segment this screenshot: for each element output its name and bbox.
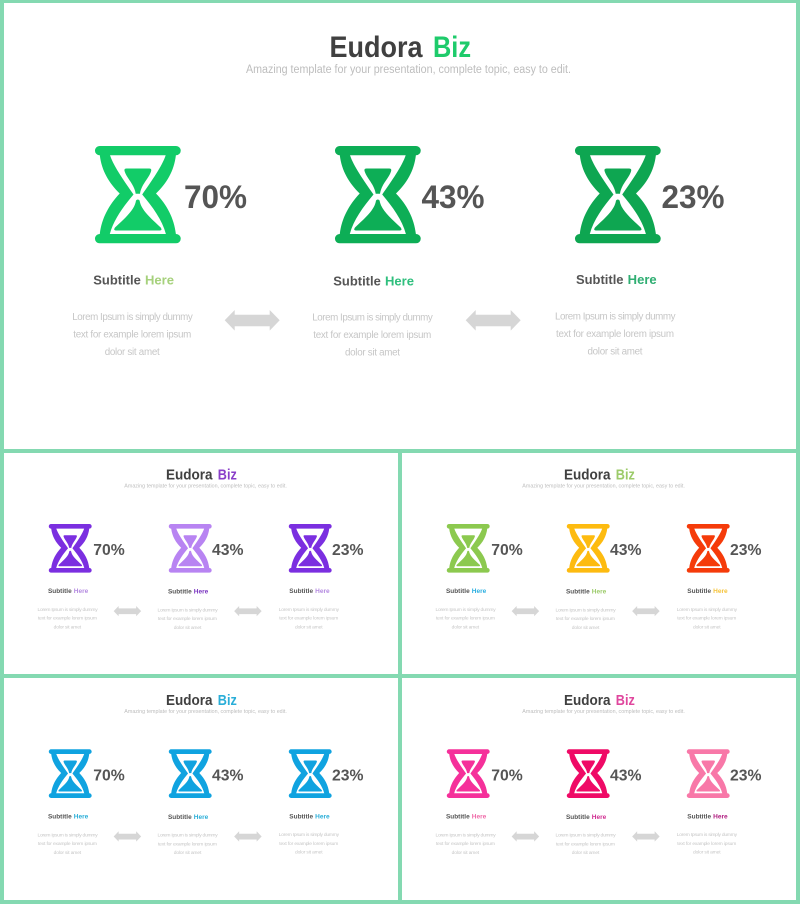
title: Eudora: [166, 692, 213, 709]
body text 1: dolor sit amet: [452, 850, 480, 856]
subtitle 2: Here: [385, 273, 414, 288]
icon: hourglass 3: [575, 146, 661, 243]
body text 2: dolor sit amet: [345, 348, 400, 359]
subtitle 2: Subtitle: [168, 814, 192, 821]
icon: hourglass 3: [687, 749, 730, 798]
subtitle 2: Here: [194, 589, 209, 596]
subtitle 1: Here: [472, 813, 487, 820]
title: Eudora: [564, 692, 611, 709]
title: Biz: [616, 466, 635, 484]
panel: blue: [37, 692, 364, 856]
icon: hourglass 2: [567, 749, 610, 798]
body text 3: Lorem Ipsum is simply dummy: [279, 607, 340, 613]
subtitle 3: Subtitle: [289, 813, 313, 820]
subtitle 3: Here: [315, 813, 330, 820]
title: Eudora: [330, 31, 423, 64]
body text 3: Lorem Ipsum is simply dummy: [555, 312, 676, 323]
body text 1: Lorem Ipsum is simply dummy: [37, 832, 98, 838]
tagline: Amazing template for your presentation, complete topic, easy to edit.: [246, 64, 571, 76]
arrow 1: [225, 310, 280, 331]
body text 3: [677, 832, 738, 856]
subtitle 3: Here: [713, 588, 728, 595]
body text 2: [157, 607, 218, 631]
body text 1: dolor sit amet: [54, 624, 82, 630]
body text 3: [555, 312, 676, 358]
body text 1: dolor sit amet: [105, 347, 160, 358]
subtitle 3: [687, 813, 728, 820]
body text 2: text for example lorem ipsum: [313, 330, 431, 341]
subtitle 3: Subtitle: [687, 813, 711, 820]
value 23%: 23%: [662, 179, 724, 215]
value 23%: 23%: [332, 767, 364, 784]
body text 1: Lorem Ipsum is simply dummy: [72, 312, 193, 323]
body text 3: dolor sit amet: [295, 850, 323, 856]
title: Biz: [433, 31, 471, 64]
body text 3: [279, 607, 340, 630]
title: Biz: [218, 466, 237, 484]
value 43%: 43%: [610, 542, 642, 559]
tagline: Amazing template for your presentation, complete topic, easy to edit.: [522, 709, 685, 715]
tagline: Amazing template for your presentation, complete topic, easy to edit.: [124, 484, 287, 490]
subtitle 2: Here: [194, 814, 209, 821]
subtitle 2: Subtitle: [566, 589, 590, 596]
icon: hourglass 1: [447, 749, 490, 798]
body text 2: dolor sit amet: [572, 850, 600, 856]
arrow 1: [114, 606, 141, 616]
icon: hourglass 1: [95, 146, 181, 243]
value 23%: 23%: [332, 542, 364, 559]
value 70%: 70%: [93, 767, 125, 784]
value 43%: 43%: [212, 767, 244, 784]
body text 2: text for example lorem ipsum: [158, 841, 217, 847]
subtitle 3: Subtitle: [687, 588, 711, 595]
body text 3: text for example lorem ipsum: [677, 841, 736, 847]
body text 1: [435, 832, 496, 856]
icon: hourglass 2: [335, 146, 421, 243]
subtitle 2: [168, 589, 209, 596]
subtitle 1: [446, 588, 487, 595]
subtitle 1: Here: [145, 272, 174, 287]
icon: hourglass 3: [687, 524, 730, 573]
subtitle 2: Here: [592, 589, 607, 596]
body text 2: [312, 313, 433, 359]
value 23%: 23%: [730, 542, 762, 559]
subtitle 1: Subtitle: [48, 588, 72, 595]
body text 1: Lorem Ipsum is simply dummy: [37, 607, 98, 613]
panel: large green: [72, 31, 725, 359]
body text 1: text for example lorem ipsum: [73, 329, 191, 340]
body text 3: dolor sit amet: [693, 624, 721, 630]
subtitle 1: [48, 813, 89, 820]
body text 2: dolor sit amet: [174, 625, 202, 631]
body text 3: [677, 607, 738, 630]
title: Biz: [218, 692, 237, 709]
body text 3: dolor sit amet: [588, 347, 643, 358]
body text 3: dolor sit amet: [295, 624, 323, 630]
arrow 2: [632, 606, 660, 616]
subtitle 3: [289, 588, 330, 595]
body text 2: [555, 607, 616, 631]
body text 3: [279, 832, 340, 856]
body text 1: Lorem Ipsum is simply dummy: [435, 832, 496, 838]
body text 2: Lorem Ipsum is simply dummy: [312, 313, 433, 324]
title: Eudora: [564, 466, 611, 484]
value 70%: 70%: [491, 542, 523, 559]
panel: purple: [37, 466, 364, 631]
body text 1: text for example lorem ipsum: [436, 616, 495, 622]
body text 3: text for example lorem ipsum: [556, 329, 674, 340]
subtitle 3: Subtitle: [576, 272, 624, 287]
subtitle 1: Here: [472, 588, 487, 595]
icon: hourglass 3: [289, 749, 332, 798]
arrow 1: [512, 831, 539, 842]
arrow 2: [234, 831, 262, 842]
subtitle 3: [687, 588, 728, 595]
body text 1: [435, 607, 496, 630]
body text 2: Lorem Ipsum is simply dummy: [157, 833, 218, 839]
subtitle 3: Here: [713, 813, 728, 820]
subtitle 1: [48, 588, 89, 595]
icon: hourglass 1: [49, 524, 92, 573]
body text 2: Lorem Ipsum is simply dummy: [555, 833, 616, 839]
body text 2: dolor sit amet: [174, 850, 202, 856]
subtitle 1: Subtitle: [446, 813, 470, 820]
icon: hourglass 2: [169, 749, 212, 798]
subtitle 3: [576, 272, 657, 287]
panel: lime amber red: [435, 466, 762, 631]
value 43%: 43%: [422, 179, 484, 215]
body text 1: Lorem Ipsum is simply dummy: [435, 607, 496, 613]
body text 3: dolor sit amet: [693, 850, 721, 856]
icon: hourglass 1: [447, 524, 490, 573]
body text 2: Lorem Ipsum is simply dummy: [157, 607, 218, 613]
body text 2: text for example lorem ipsum: [556, 616, 615, 622]
body text 1: dolor sit amet: [54, 850, 82, 856]
subtitle 2: Subtitle: [566, 814, 590, 821]
arrow 1: [114, 831, 141, 842]
subtitle 3: Here: [315, 588, 330, 595]
subtitle 2: Subtitle: [168, 589, 192, 596]
subtitle 2: Subtitle: [333, 273, 381, 288]
value 70%: 70%: [184, 179, 247, 215]
subtitle 2: [333, 273, 414, 288]
body text 1: text for example lorem ipsum: [38, 841, 97, 847]
subtitle 2: [566, 589, 607, 596]
subtitle 2: [566, 814, 607, 821]
value 23%: 23%: [730, 767, 762, 784]
value 43%: 43%: [212, 542, 244, 559]
subtitle 3: Subtitle: [289, 588, 313, 595]
body text 3: text for example lorem ipsum: [279, 616, 338, 622]
body text 1: text for example lorem ipsum: [436, 841, 495, 847]
body text 2: text for example lorem ipsum: [556, 841, 615, 847]
icon: hourglass 2: [567, 524, 610, 573]
icon: hourglass 1: [49, 749, 92, 798]
subtitle 1: [93, 272, 174, 287]
subtitle 3: Here: [628, 272, 657, 287]
body text 2: Lorem Ipsum is simply dummy: [555, 607, 616, 613]
body text 1: [37, 607, 98, 630]
subtitle 1: Subtitle: [93, 272, 141, 287]
body text 3: text for example lorem ipsum: [279, 841, 338, 847]
panel: pink: [435, 692, 762, 856]
subtitle 3: [289, 813, 330, 820]
arrow 1: [512, 606, 539, 616]
body text 3: Lorem Ipsum is simply dummy: [677, 832, 738, 838]
arrow 2: [234, 606, 262, 616]
body text 1: dolor sit amet: [452, 624, 480, 630]
title: Biz: [616, 692, 635, 709]
subtitle 2: [168, 814, 209, 821]
value 43%: 43%: [610, 767, 642, 784]
subtitle 1: Subtitle: [48, 813, 72, 820]
value 70%: 70%: [93, 542, 125, 559]
subtitle 1: [446, 813, 487, 820]
tagline: Amazing template for your presentation, complete topic, easy to edit.: [124, 709, 287, 715]
value 70%: 70%: [491, 767, 523, 784]
subtitle 1: Here: [74, 588, 89, 595]
body text 3: Lorem Ipsum is simply dummy: [279, 832, 340, 838]
arrow 2: [466, 310, 521, 331]
body text 2: dolor sit amet: [572, 625, 600, 631]
icon: hourglass 2: [169, 524, 212, 573]
body text 1: [37, 832, 98, 856]
subtitle 1: Subtitle: [446, 588, 470, 595]
subtitle 2: Here: [592, 814, 607, 821]
body text 1: [72, 312, 193, 358]
icon: hourglass 3: [289, 524, 332, 573]
body text 3: text for example lorem ipsum: [677, 616, 736, 622]
body text 2: [157, 833, 218, 856]
body text 3: Lorem Ipsum is simply dummy: [677, 607, 738, 613]
body text 2: text for example lorem ipsum: [158, 616, 217, 622]
body text 2: [555, 833, 616, 856]
body text 1: text for example lorem ipsum: [38, 616, 97, 622]
subtitle 1: Here: [74, 813, 89, 820]
title: Eudora: [166, 466, 213, 484]
tagline: Amazing template for your presentation, complete topic, easy to edit.: [522, 484, 685, 490]
arrow 2: [632, 831, 660, 842]
